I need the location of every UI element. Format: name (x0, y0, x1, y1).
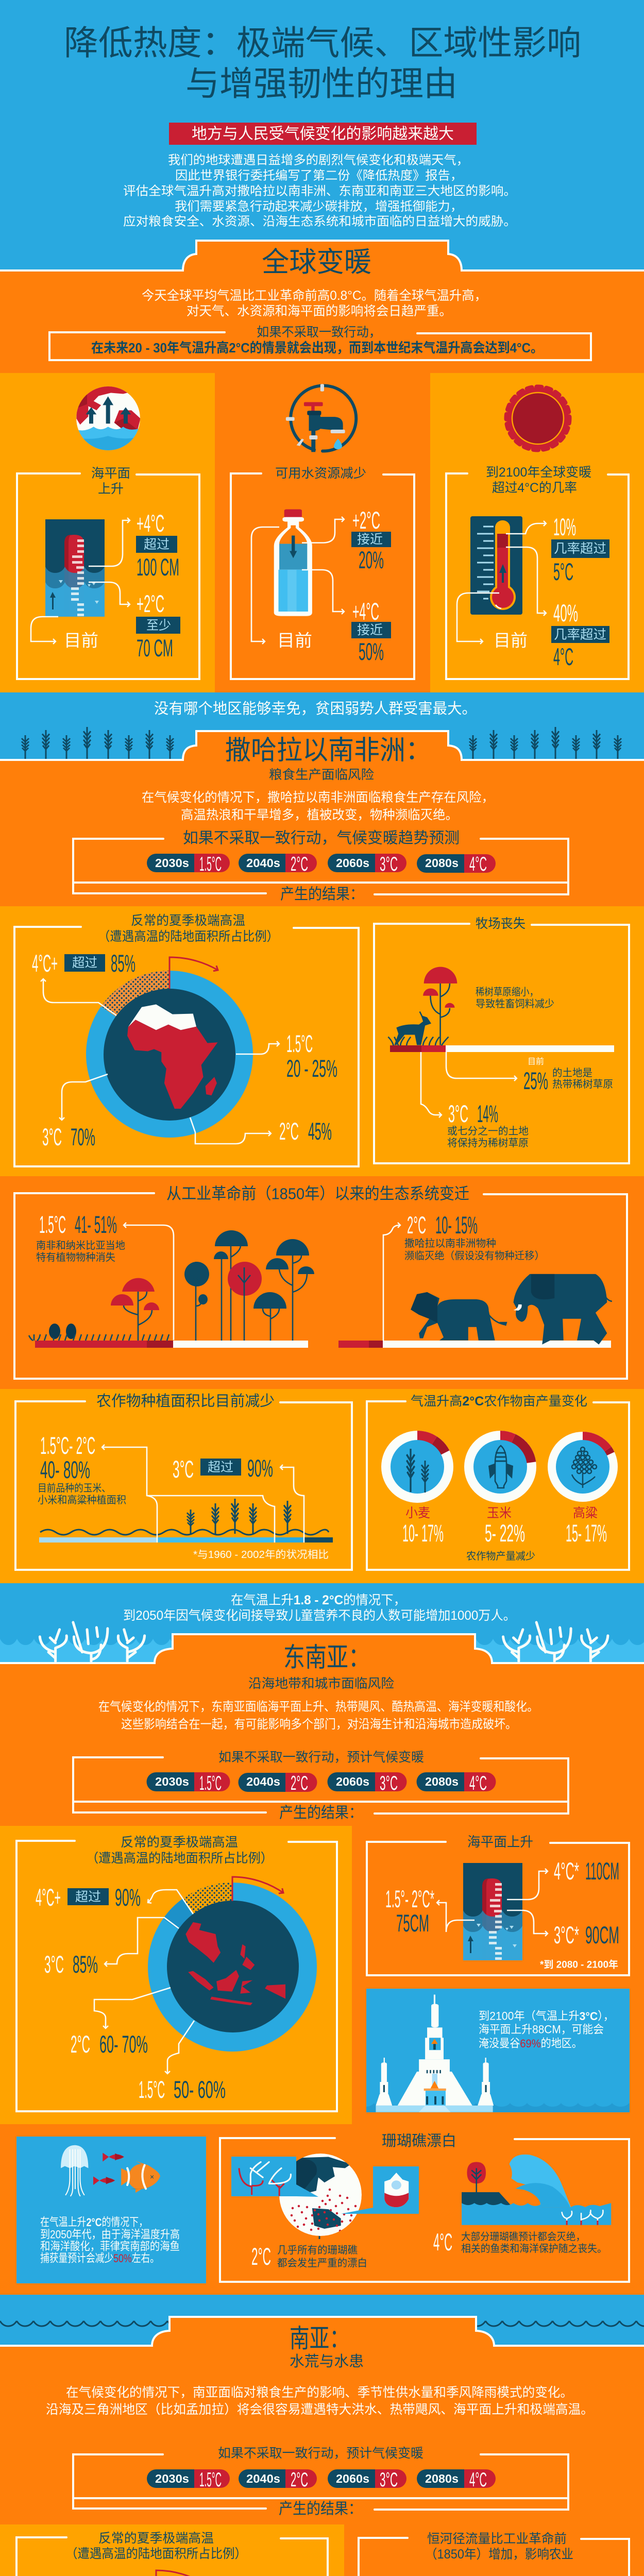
label: 4 degrees plus (36, 1884, 193, 1914)
Bangkok text: 淹没曼谷69%的地区。 (479, 2037, 582, 2049)
arrow and label: 40 percent: 几率超过 (554, 628, 606, 642)
intro paragraph: 我们的地球遭遇日益增多的剧烈气候变化和极端天气， (168, 154, 469, 167)
fisheries text (40, 2215, 180, 2265)
label: 3 degrees 14 percent: 3°C (448, 1100, 468, 1127)
label: 1.5 degrees ecosystem: 南非和纳米比亚当地 (36, 1240, 125, 1251)
projected warming timeline: Southeast Asia: 3°C (380, 1772, 398, 1794)
projected warming timeline: Southeast Asia: 2080s (425, 1775, 459, 1788)
panel: ecosystem shifts (14, 1185, 627, 1379)
projected warming timeline: Africa: 如果不采取一致行动，气候变暖趋势预测 (183, 829, 460, 847)
intro paragraph: 因此世界银行委托编写了第二份《降低热度》报告， (175, 169, 463, 182)
chart: India ring (72, 2570, 240, 2576)
panel: water availability (231, 384, 414, 679)
chart: maize donut: 玉米 (487, 1506, 512, 1520)
blue statement: child malnutrition (123, 1593, 516, 1623)
label: 3 degrees 14 percent: 或七分之一的土地 (447, 1125, 529, 1137)
label: 3 degrees (44, 1918, 179, 1978)
projected warming timeline: South Asia: 产生的结果： (279, 2501, 362, 2517)
label: today 25 percent: 热带稀树草原 (552, 1078, 613, 1090)
fisheries text: 捕获量预计会减少50%左右。 (40, 2251, 159, 2265)
frame and heading (220, 2132, 629, 2282)
frame and heading: （遭遇高温的陆地面积所占比例） (98, 929, 279, 944)
arrow and label: today water: 目前 (277, 631, 312, 650)
subheading: food production: 粮食生产面临风险 (269, 768, 374, 782)
label: 2 degrees ecosystem: 濒临灭绝（假设没有物种迁移） (404, 1250, 545, 1262)
label: 3 degrees: 3°C (42, 1123, 62, 1150)
label: 4 degrees plus: 90% (115, 1884, 141, 1911)
projected warming timeline: Africa: 4°C (469, 853, 487, 875)
label: 1.5 degrees: 1.5°C (139, 2076, 165, 2103)
label: 1.5 degrees ecosystem: 特有植物物种消失 (36, 1251, 115, 1263)
illustration: lion and elephant (411, 1274, 612, 1345)
Africa paragraph: 高温热浪和干旱增多，植被改变，物种濒临灭绝。 (181, 808, 458, 822)
text: savanna shrinks (476, 986, 554, 1010)
blue statement: no region spared: 没有哪个地区能够幸免，贫困弱势人群受害最大。 (154, 700, 477, 717)
frame and heading: 牧场丧失 (476, 917, 526, 931)
frame and heading (16, 1835, 337, 2111)
inset: bleached polyp (341, 2166, 419, 2214)
callout: if no concerted action: 如果不采取一致行动， (257, 325, 381, 340)
label: 1.5 degrees: 20 - 25% (286, 1055, 337, 1082)
Africa paragraph: 在气候变化的情况下，撒哈拉以南非洲面临粮食生产存在风险， (142, 790, 494, 805)
label: 3 degrees 14 percent (421, 1052, 529, 1149)
label: 4 degrees reefs: 相关的鱼类和海洋保护随之丧失。 (461, 2243, 607, 2255)
frame and heading: probability (446, 465, 629, 679)
frame and heading: 海平面上升 (467, 1834, 533, 1850)
label: 2 degrees reefs: 都会发生严重的漂白 (277, 2257, 367, 2269)
projected warming timeline: Southeast Asia: 2°C (291, 1772, 308, 1794)
projected warming timeline: South Asia (73, 2446, 568, 2517)
label: 1.5 to 2 degrees sea: 75CM (396, 1909, 429, 1937)
arrow and label: 10 percent: 10% (553, 513, 576, 540)
projected warming timeline: South Asia: 2080s (425, 2472, 459, 2485)
projected warming timeline: South Asia: 2030s (155, 2472, 189, 2485)
section tab: South Asia (0, 2317, 644, 2354)
text: savanna shrinks: 导致牲畜饲料减少 (476, 998, 554, 1010)
label: 1.5 to 2 degrees sea: 1.5°- 2°C* (385, 1885, 434, 1912)
panel: extreme heat South Asia (16, 2531, 328, 2576)
callout: if no concerted action: 在未来20 - 30年气温升高2°C的情景就会出现，而到本世纪末气温升高会达到4°C。 (91, 340, 543, 355)
label: 3 degrees (42, 1074, 108, 1150)
frame and heading: water (231, 466, 414, 679)
projected warming timeline: Africa: 2060s (336, 856, 369, 870)
projected warming timeline: Southeast Asia: 2040s (246, 1775, 280, 1788)
panel: likelihood of 4 degrees (446, 387, 629, 679)
arrow and label: 40 percent (506, 547, 609, 670)
caption: 农作物产量减少 (466, 1550, 535, 1562)
projected warming timeline: South Asia: 3°C (380, 2469, 398, 2491)
blue statement: child malnutrition: 到2050年因气候变化间接导致儿童营养不良的人数可能增加1000万人。 (123, 1608, 516, 1623)
label: today 25 percent: 25% (523, 1067, 548, 1094)
label: 3 degrees crops: 3°C (173, 1455, 194, 1483)
projected warming timeline: Southeast Asia: 1.5°C (199, 1772, 222, 1794)
text: savanna shrinks: 稀树草原缩小， (476, 986, 538, 998)
arrow and label: 10 percent: 几率超过 (554, 541, 606, 556)
label: 3 degrees 14 percent: 14% (477, 1100, 498, 1127)
arrow and label: today probability: 目前 (494, 631, 528, 650)
panel: crop area reduction (15, 1393, 352, 1570)
arrow and label: 40 percent: 4°C (553, 643, 573, 670)
panel: savanna loss (374, 917, 629, 1163)
label: 1.5 degrees (139, 2021, 226, 2103)
South Asia paragraph: 在气候变化的情况下，南亚面临对粮食生产的影响、季节性供水量和季风降雨模式的变化。 (66, 2385, 573, 2400)
global warming text (142, 289, 487, 318)
icon row: wheat (22, 727, 621, 759)
global warming text: 对天气、水资源和海平面的影响将会日趋严重。 (187, 304, 452, 318)
label: 4 degrees reefs (433, 2228, 607, 2256)
frame and heading (374, 917, 629, 1163)
chart: sorghum donut (548, 1432, 618, 1547)
South Asia paragraph: 沿海及三角洲地区（比如孟加拉）将会很容易遭遇特大洪水、热带飓风、海平面上升和极端高温。 (46, 2402, 594, 2417)
projected warming timeline: Africa: 产生的结果： (280, 886, 364, 903)
Bangkok text: 海平面上升88CM，可能会 (479, 2023, 604, 2036)
projected warming timeline: Africa: 2080s (425, 856, 459, 870)
label: 3 degrees crops: 超过 (208, 1460, 233, 1475)
illustration: sea band and corals (0, 1622, 644, 1663)
projected warming timeline: Southeast Asia: 4°C (469, 1772, 487, 1794)
Bangkok text (479, 2009, 614, 2049)
arrow and label: today water (251, 527, 312, 650)
label: 4 degrees plus: 超过 (75, 1890, 101, 1904)
frame and heading: 反常的夏季极端高温 (131, 913, 245, 928)
frame and heading: 农作物种植面积比目前减少 (96, 1393, 275, 1410)
arrow and label: +2 degrees: 70 CM (137, 634, 173, 662)
label: 4 degrees plus: 85% (111, 950, 135, 977)
frame and heading (367, 1834, 629, 1975)
label: 2 degrees: 2°C (279, 1117, 299, 1145)
label: today 25 percent: 目前 (528, 1057, 544, 1066)
label: 3 degrees sea: 3°C* (554, 1921, 579, 1948)
subheading: water: 水荒与水患 (290, 2353, 364, 2370)
frame and heading: sea level: 上升 (98, 482, 124, 496)
label: 3 degrees: 3°C (44, 1951, 64, 1978)
label: 1.5 degrees ecosystem: 41- 51% (75, 1211, 117, 1238)
label: 1.5 to 2 degrees crops: 1.5°C- 2°C (40, 1432, 95, 1459)
arrow and label: +2 degrees: +2°C (137, 590, 164, 617)
panel: sea level Southeast Asia (367, 1834, 629, 1975)
panel: extreme heat Southeast Asia (16, 1835, 337, 2111)
frame and heading: sea level: 海平面 (91, 466, 130, 481)
label: 1.5 degrees: 1.5°C (286, 1030, 313, 1057)
ground bars (35, 1341, 611, 1348)
chart: Southeast Asia ring (148, 1877, 317, 2052)
arrow and label: +4 degrees water: 50% (359, 638, 384, 665)
frame and heading: 反常的夏季极端高温 (98, 2531, 214, 2546)
title: 与增强韧性的理由 (185, 64, 457, 103)
illustration: savanna tree and gazelle (388, 967, 614, 1052)
label: 1.5 degrees ecosystem (36, 1211, 174, 1340)
arrow and label: +2 degrees: 至少 (146, 618, 171, 633)
label: 1.5 to 2 degrees crops: 40- 80% (40, 1456, 90, 1483)
icon: sea level globe (76, 386, 140, 450)
frame and heading: sea level (17, 466, 199, 679)
section tab: South Asia: 南亚： (290, 2324, 349, 2353)
label: 2 degrees ecosystem: 2°C (407, 1211, 426, 1239)
frame and heading: probability: 到2100年全球变暖 (486, 465, 591, 480)
arrow and label: today: 目前 (64, 631, 98, 650)
projected warming timeline: South Asia: 如果不采取一致行动，预计气候变暖 (218, 2446, 423, 2461)
Africa paragraph (142, 790, 494, 822)
projected warming timeline: South Asia: 2040s (246, 2472, 280, 2485)
panel: crop yields (367, 1394, 629, 1570)
label: 1.5 degrees ecosystem: 1.5°C (39, 1211, 66, 1238)
label: 2 degrees ecosystem: 10- 15% (435, 1211, 478, 1239)
title: 降低热度：极端气候、区域性影响 (64, 24, 581, 62)
label: 4 degrees sea (507, 1857, 619, 1900)
label: 1.5 to 2 degrees crops: 小米和高粱种植面积 (38, 1494, 126, 1506)
projected warming timeline: South Asia: 2°C (291, 2469, 308, 2491)
intro paragraph: 应对粮食安全、水资源、沿海生态系统和城市面临的日益增大的威胁。 (123, 214, 516, 229)
panel: extreme heat Africa (14, 913, 359, 1166)
frame and heading: （1850年）增加，影响农业 (425, 2547, 573, 2562)
illustration: trees (29, 1230, 314, 1341)
frame and heading: 从工业革命前（1850年）以来的生态系统变迁 (166, 1185, 469, 1202)
illustration: reef loss wave (462, 2155, 611, 2225)
arrow and label: +2 degrees water: 接近 (357, 532, 383, 547)
label: 1.5 degrees (236, 1030, 337, 1082)
label: 1.5 to 2 degrees crops: 目前品种的玉米、 (38, 1482, 111, 1494)
global warming text: 今天全球平均气温比工业革命前高0.8°C。随着全球气温升高， (142, 289, 487, 303)
section tab: global warming: 全球变暖 (262, 247, 371, 278)
chart: wheat donut (381, 1431, 453, 1547)
ground bar and wheat (39, 1499, 333, 1543)
projected warming timeline: Southeast Asia: 2030s (155, 1775, 189, 1788)
label: 3 degrees: 85% (73, 1951, 98, 1978)
section tab: sub-Saharan Africa: 撒哈拉以南非洲： (225, 736, 431, 766)
frame and heading: 气温升高2°C农作物亩产量变化 (411, 1394, 587, 1409)
frame and heading: 恒河径流量比工业革命前 (427, 2532, 567, 2546)
arrow and label: +2 degrees water: 20% (359, 546, 384, 573)
illustration: temple (376, 1995, 494, 2112)
frame and heading: 珊瑚礁漂白 (382, 2132, 456, 2149)
label: 2 degrees (190, 1117, 332, 1145)
arrow and label: +4 degrees water: +4°C (352, 598, 379, 625)
fish eye: × (150, 2173, 154, 2181)
fisheries text: 在气温上升2°C的情况下， (40, 2215, 148, 2229)
map: coral globe (279, 2154, 362, 2239)
label: 4 degrees plus: 4°C+ (36, 1884, 61, 1911)
frame and heading (359, 2532, 629, 2576)
label: 2 degrees ecosystem (383, 1211, 545, 1341)
label: 2 degrees (71, 1988, 171, 2058)
arrow and label: +2 degrees water: +2°C (352, 506, 380, 534)
section tab: global warming (0, 241, 644, 278)
panel: Bangkok (366, 1989, 630, 2112)
section tab: sub-Saharan Africa (0, 731, 644, 768)
chart: sea level thermometer (45, 519, 105, 617)
panel: extreme heat Africa: 45% (308, 1117, 332, 1145)
frame and heading (14, 913, 359, 1166)
panel: fisheries (16, 2137, 206, 2283)
arrow and label: 40 percent: 40% (553, 599, 578, 626)
panel: Ganges runoff (359, 2532, 629, 2576)
chart: sea level thermometer (463, 1863, 522, 1960)
arrow and label: +2 degrees (89, 582, 180, 662)
intro paragraph: 评估全球气温升高对撒哈拉以南非洲、东南亚和南亚三大地区的影响。 (123, 184, 516, 198)
label: 3 degrees: 70% (71, 1123, 95, 1150)
intro paragraph (123, 154, 516, 229)
arrow and label: +4 degrees: +4°C (137, 510, 164, 537)
arrow and label: today probability (457, 593, 528, 650)
label: 1.5 to 2 degrees crops (38, 1432, 275, 1543)
projected warming timeline: Africa: 1.5°C (199, 853, 222, 875)
label: 4 degrees plus: 4°C+ (32, 950, 58, 977)
label: 2 degrees reefs: 2°C (251, 2243, 271, 2270)
chart: sorghum donut: 高粱 (573, 1506, 598, 1520)
chart: wheat donut: 10- 17% (402, 1519, 444, 1547)
frame and heading: water: 可用水资源减少 (275, 466, 366, 481)
frame and heading (16, 2531, 328, 2576)
arrow and label: +4 degrees (89, 510, 179, 581)
projected warming timeline: South Asia: 2060s (336, 2472, 369, 2485)
icon: thermometer (470, 516, 522, 615)
projected warming timeline: Africa (73, 829, 568, 903)
section tab: Southeast Asia: 东南亚： (283, 1643, 370, 1673)
frame and heading: 反常的夏季极端高温 (121, 1835, 238, 1850)
label: 2 degrees ecosystem: 撒哈拉以南非洲物种 (404, 1238, 496, 1249)
arrow and label: +4 degrees: 超过 (144, 537, 170, 552)
Southeast Asia paragraph (98, 1700, 538, 1731)
intro paragraph: 我们需要紧急行动起来减少碳排放，增强抵御能力， (175, 200, 463, 213)
arrow and label: 10 percent: 5°C (553, 558, 573, 585)
footnote: *与1960 - 2002年的状况相比 (193, 1549, 329, 1561)
label: 2 degrees: 2°C (71, 2030, 90, 2058)
icon: faucet (286, 384, 356, 452)
arrow and label: +4 degrees water: 接近 (357, 623, 383, 637)
projected warming timeline: Africa: 3°C (380, 853, 398, 875)
frame and heading: （遭遇高温的陆地面积所占比例） (86, 1851, 273, 1866)
chart: wheat donut: 小麦 (405, 1506, 430, 1520)
projected warming timeline: Africa: 2°C (291, 853, 308, 875)
frame and heading (367, 1394, 629, 1570)
label: 3 degrees crops: 90% (247, 1454, 273, 1482)
projected warming timeline: Southeast Asia (73, 1750, 568, 1822)
arrow and label: +2 degrees water (302, 506, 391, 573)
projected warming timeline: Africa: 2040s (246, 856, 280, 870)
icon: sun (506, 387, 569, 450)
arrow and label: +4 degrees water (302, 570, 391, 665)
label: today 25 percent (446, 1052, 613, 1094)
label: 2 degrees reefs: 几乎所有的珊瑚礁 (277, 2244, 358, 2256)
arrow and label: today (31, 617, 98, 650)
icon: water bottle (274, 510, 312, 616)
label: 3 degrees crops (173, 1454, 304, 1543)
arrow and label: +4 degrees: 100 CM (137, 553, 179, 581)
blue statement: child malnutrition: 在气温上升1.8 - 2°C的情况下， (231, 1593, 406, 1607)
panel: sea level rise (17, 386, 199, 679)
projected warming timeline: South Asia: 1.5°C (199, 2469, 222, 2491)
label: today 25 percent: 的土地是 (552, 1067, 592, 1079)
label: 4 degrees plus (32, 950, 135, 1015)
projected warming timeline: Southeast Asia: 如果不采取一致行动，预计气候变暖 (218, 1750, 424, 1765)
frame and heading (14, 1185, 627, 1379)
Southeast Asia paragraph: 这些影响结合在一起，有可能影响多个部门，对沿海生计和沿海城市造成破坏。 (121, 1718, 517, 1731)
arrow and label: 10 percent (506, 513, 609, 585)
chart: Africa ring (86, 957, 253, 1138)
red subtitle banner: 地方与人民受气候变化的影响越来越大 (192, 126, 454, 142)
frame and heading: （遭遇高温的陆地面积所占比例） (65, 2547, 247, 2561)
projected warming timeline: South Asia: 4°C (469, 2469, 487, 2491)
subheading: coasts and cities: 沿海地带和城市面临风险 (248, 1676, 394, 1691)
section tab: Southeast Asia (0, 1634, 644, 1673)
illustration: jellyfish and fish (61, 2145, 160, 2196)
panel: coral bleaching (220, 2132, 629, 2282)
footnote: *到 2080 - 2100年 (540, 1959, 618, 1970)
red subtitle banner (169, 123, 477, 145)
frame and heading: probability: 超过4°C的几率 (492, 481, 577, 495)
wave band (0, 2320, 644, 2328)
projected warming timeline: Africa: 2030s (155, 856, 189, 870)
fisheries text: 和海洋酸化，菲律宾南部的海鱼 (40, 2240, 180, 2252)
Southeast Asia paragraph: 在气候变化的情况下，东南亚面临海平面上升、热带飓风、酷热高温、海洋变暖和酸化。 (98, 1700, 538, 1714)
South Asia paragraph (46, 2385, 594, 2417)
chart: maize donut (464, 1431, 536, 1547)
label: 2 degrees: 60- 70% (99, 2030, 148, 2058)
label: 2 degrees reefs (251, 2243, 367, 2270)
label: 4 degrees reefs: 4°C (433, 2228, 452, 2256)
projected warming timeline: Southeast Asia: 产生的结果： (279, 1804, 363, 1822)
projected warming timeline: Southeast Asia: 2060s (336, 1775, 369, 1788)
label: 1.5 degrees: 50- 60% (174, 2076, 226, 2103)
label: 4 degrees reefs: 大部分珊瑚礁预计都会灭绝， (461, 2231, 585, 2243)
label: 3 degrees sea (507, 1910, 619, 1948)
chart: maize donut: 5- 22% (485, 1519, 525, 1547)
inset: coral reef (231, 2157, 318, 2197)
Bangkok text: 到2100年（气温上升3°C）， (479, 2009, 614, 2023)
frame and heading (15, 1393, 352, 1570)
title (64, 24, 581, 103)
label: 4 degrees sea: 4°C* (554, 1857, 579, 1885)
fisheries text: 到2050年代，由于海洋温度升高 (40, 2228, 180, 2241)
callout: if no concerted action (49, 325, 591, 360)
label: 3 degrees 14 percent: 将保持为稀树草原 (447, 1137, 529, 1149)
label: 1.5 to 2 degrees sea (385, 1885, 474, 1937)
label: 4 degrees plus: 超过 (72, 956, 97, 970)
